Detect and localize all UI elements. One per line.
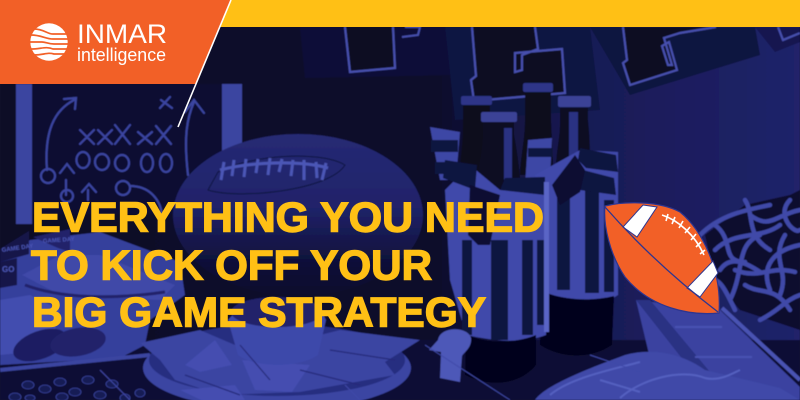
logo subline: intelligence [77, 44, 166, 65]
foam finger [535, 352, 800, 400]
orange logo tab [0, 0, 231, 84]
plate of chips [140, 297, 420, 400]
logo globe [30, 23, 68, 61]
game day flags: GAME DAY [1, 244, 34, 254]
shredded paper [700, 190, 800, 330]
table surface [0, 340, 800, 400]
logo wordmark: INMAR [77, 19, 167, 49]
whistle [429, 329, 471, 382]
orange football icon [605, 203, 719, 314]
game day flags: GO [2, 265, 14, 274]
headline line 2: TO KICK OFF YOUR [31, 242, 432, 288]
game day flags [0, 229, 75, 288]
left jersey [445, 165, 548, 341]
beads [9, 376, 145, 400]
right jersey [535, 150, 618, 301]
field ramp [636, 300, 800, 400]
football seam [605, 207, 718, 312]
game day flags: GAME DAY [43, 237, 75, 245]
game day snacks left [0, 229, 185, 370]
white diagonal line [178, 0, 231, 127]
chalkboard [16, 84, 242, 224]
striped bottle koozies [430, 83, 618, 383]
rear bottles [458, 105, 494, 195]
football laces [662, 214, 705, 255]
headline line 3: BIG GAME STRATEGY [32, 288, 486, 336]
top yellow bar [220, 0, 800, 27]
field lines on table [100, 345, 640, 400]
headline line 1: EVERYTHING YOU NEED [32, 194, 544, 240]
big football [173, 134, 423, 296]
rear koozie flaps [430, 127, 460, 180]
football stripes [623, 205, 657, 237]
logo [30, 19, 167, 65]
pennant banner [300, 27, 800, 120]
headline [31, 194, 544, 336]
